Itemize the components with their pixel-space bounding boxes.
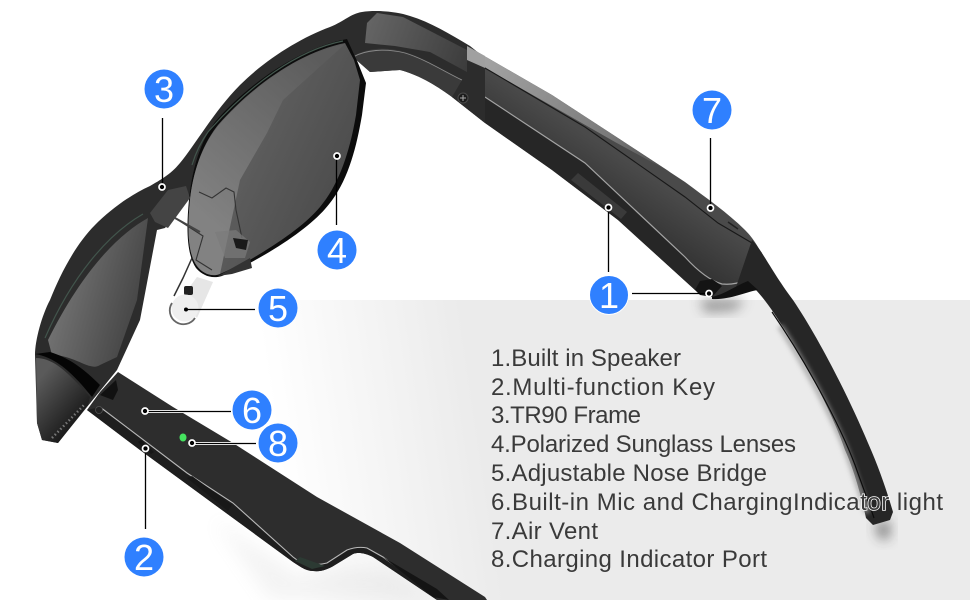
feature list [491, 345, 943, 573]
callout 4: polarized lenses: 4 [327, 230, 347, 271]
top panel [365, 13, 467, 72]
lower strip [87, 407, 437, 600]
callout 6: mic and indicator: 6 [242, 390, 262, 431]
light temple junction [467, 46, 485, 68]
callout 8: charging port [189, 423, 298, 464]
feature list: 7.Air Vent [491, 518, 598, 545]
callout 6: mic and indicator [142, 390, 272, 431]
feature list: 4.Polarized Sunglass Lenses [491, 431, 796, 458]
near temple arm and ear hook [452, 46, 893, 525]
callout 2: multi-function key [124, 446, 164, 578]
temple joint [353, 49, 462, 97]
feature list: 5.Adjustable Nose Bridge [491, 460, 767, 487]
feature list: 3.TR90 Frame [491, 402, 641, 429]
nose pad wire [175, 188, 242, 270]
green charging LED [180, 434, 186, 442]
feature list: 8.Charging Indicator Port [491, 546, 767, 573]
callout 3: TR90 frame: 3 [154, 69, 174, 110]
temple body [452, 46, 762, 297]
ear hook [735, 240, 893, 525]
lens glare [188, 44, 345, 275]
feature list: 6.Built-in Mic and ChargingIndicator light [491, 489, 943, 516]
far temple arm [87, 372, 487, 600]
callout 7: air vent [692, 90, 732, 211]
multi-function key [138, 440, 154, 454]
callout 1: built in speaker: 1 [599, 275, 619, 316]
callout 7: air vent: 7 [702, 90, 722, 131]
feature list: 2.Multi-function Key [491, 374, 715, 401]
ear hook port [695, 279, 722, 297]
silver seam [485, 97, 750, 284]
large right lens [175, 39, 366, 277]
front frame [35, 11, 485, 443]
hinge detail [100, 380, 118, 400]
frame silhouette [35, 11, 485, 443]
glasses shadows [215, 300, 890, 600]
speaker grille [571, 173, 627, 219]
small left lens [35, 214, 148, 443]
callout 2: multi-function key: 2 [134, 537, 154, 578]
air vent slot [728, 222, 738, 229]
callout 8: charging port: 8 [268, 423, 288, 464]
lower lens edge [36, 358, 90, 443]
feature list: 1.Built in Speaker [491, 345, 681, 372]
highlight band along the temple top [467, 46, 670, 172]
hinge screw [458, 93, 468, 103]
callout 5: nose bridge: 5 [268, 288, 288, 329]
callout 4: polarized lenses [318, 153, 356, 271]
bridge [150, 186, 200, 232]
lower dark strip of the temple [452, 84, 718, 297]
callout 5: nose bridge [184, 288, 298, 329]
callout 1: built in speaker [590, 204, 712, 316]
adjustable nose bridge pad [170, 258, 213, 324]
callout 3: TR90 frame [144, 69, 184, 190]
side port slot [187, 476, 232, 511]
